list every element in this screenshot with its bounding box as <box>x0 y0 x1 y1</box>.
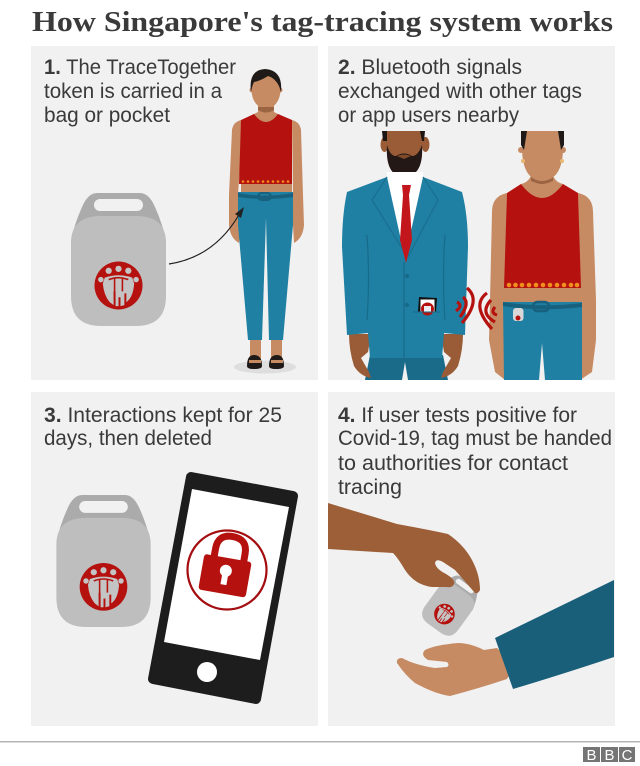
icon: padlock <box>188 530 266 610</box>
step 2 text: exchanged with other tags <box>338 80 582 103</box>
BBC logo: C <box>622 747 633 764</box>
step 2 text <box>338 56 582 127</box>
signal waves left <box>456 288 473 323</box>
step 3 text <box>44 404 282 450</box>
receiving arm <box>397 580 614 696</box>
panel 3: interactions <box>31 392 318 726</box>
step 2 text: 2. Bluetooth signals <box>338 56 522 79</box>
step 4 text: tracing <box>338 476 402 499</box>
pocket tag <box>413 297 440 316</box>
icon: phone <box>153 477 293 699</box>
panel 4: hand over <box>328 392 615 726</box>
title: How Singapore's tag-tracing system works <box>32 6 613 38</box>
icon: token tag <box>56 495 151 627</box>
step 1 text: token is carried in a <box>44 80 222 103</box>
step 4 text: 4. If user tests positive for <box>338 404 577 427</box>
icon: small tag <box>418 570 484 640</box>
BBC logo <box>583 747 635 764</box>
signal waves right <box>480 293 497 329</box>
step 4 text: Covid-19, tag must be handed <box>338 427 612 450</box>
step 3 text: days, then deleted <box>44 427 212 450</box>
man in suit <box>342 131 468 380</box>
icon: token tag <box>71 193 166 326</box>
step 2 text: or app users nearby <box>338 104 519 127</box>
standing woman <box>229 69 304 374</box>
step 3 text: 3. Interactions kept for 25 <box>44 404 282 427</box>
step 4 text: to authorities for contact <box>338 452 568 475</box>
woman <box>489 131 596 380</box>
panel 1: token carried <box>31 46 318 380</box>
step 1 text <box>44 56 236 127</box>
arrow <box>169 207 244 264</box>
footer rule <box>0 741 640 742</box>
step 1 text: 1. The TraceTogether <box>44 56 236 79</box>
step 1 text: bag or pocket <box>44 104 170 127</box>
BBC logo: B <box>604 747 615 764</box>
BBC logo: B <box>586 747 597 764</box>
step 4 text <box>338 404 612 499</box>
pocket tag woman <box>513 308 524 321</box>
upper hand <box>328 503 480 593</box>
panel 2: bluetooth <box>328 46 615 380</box>
